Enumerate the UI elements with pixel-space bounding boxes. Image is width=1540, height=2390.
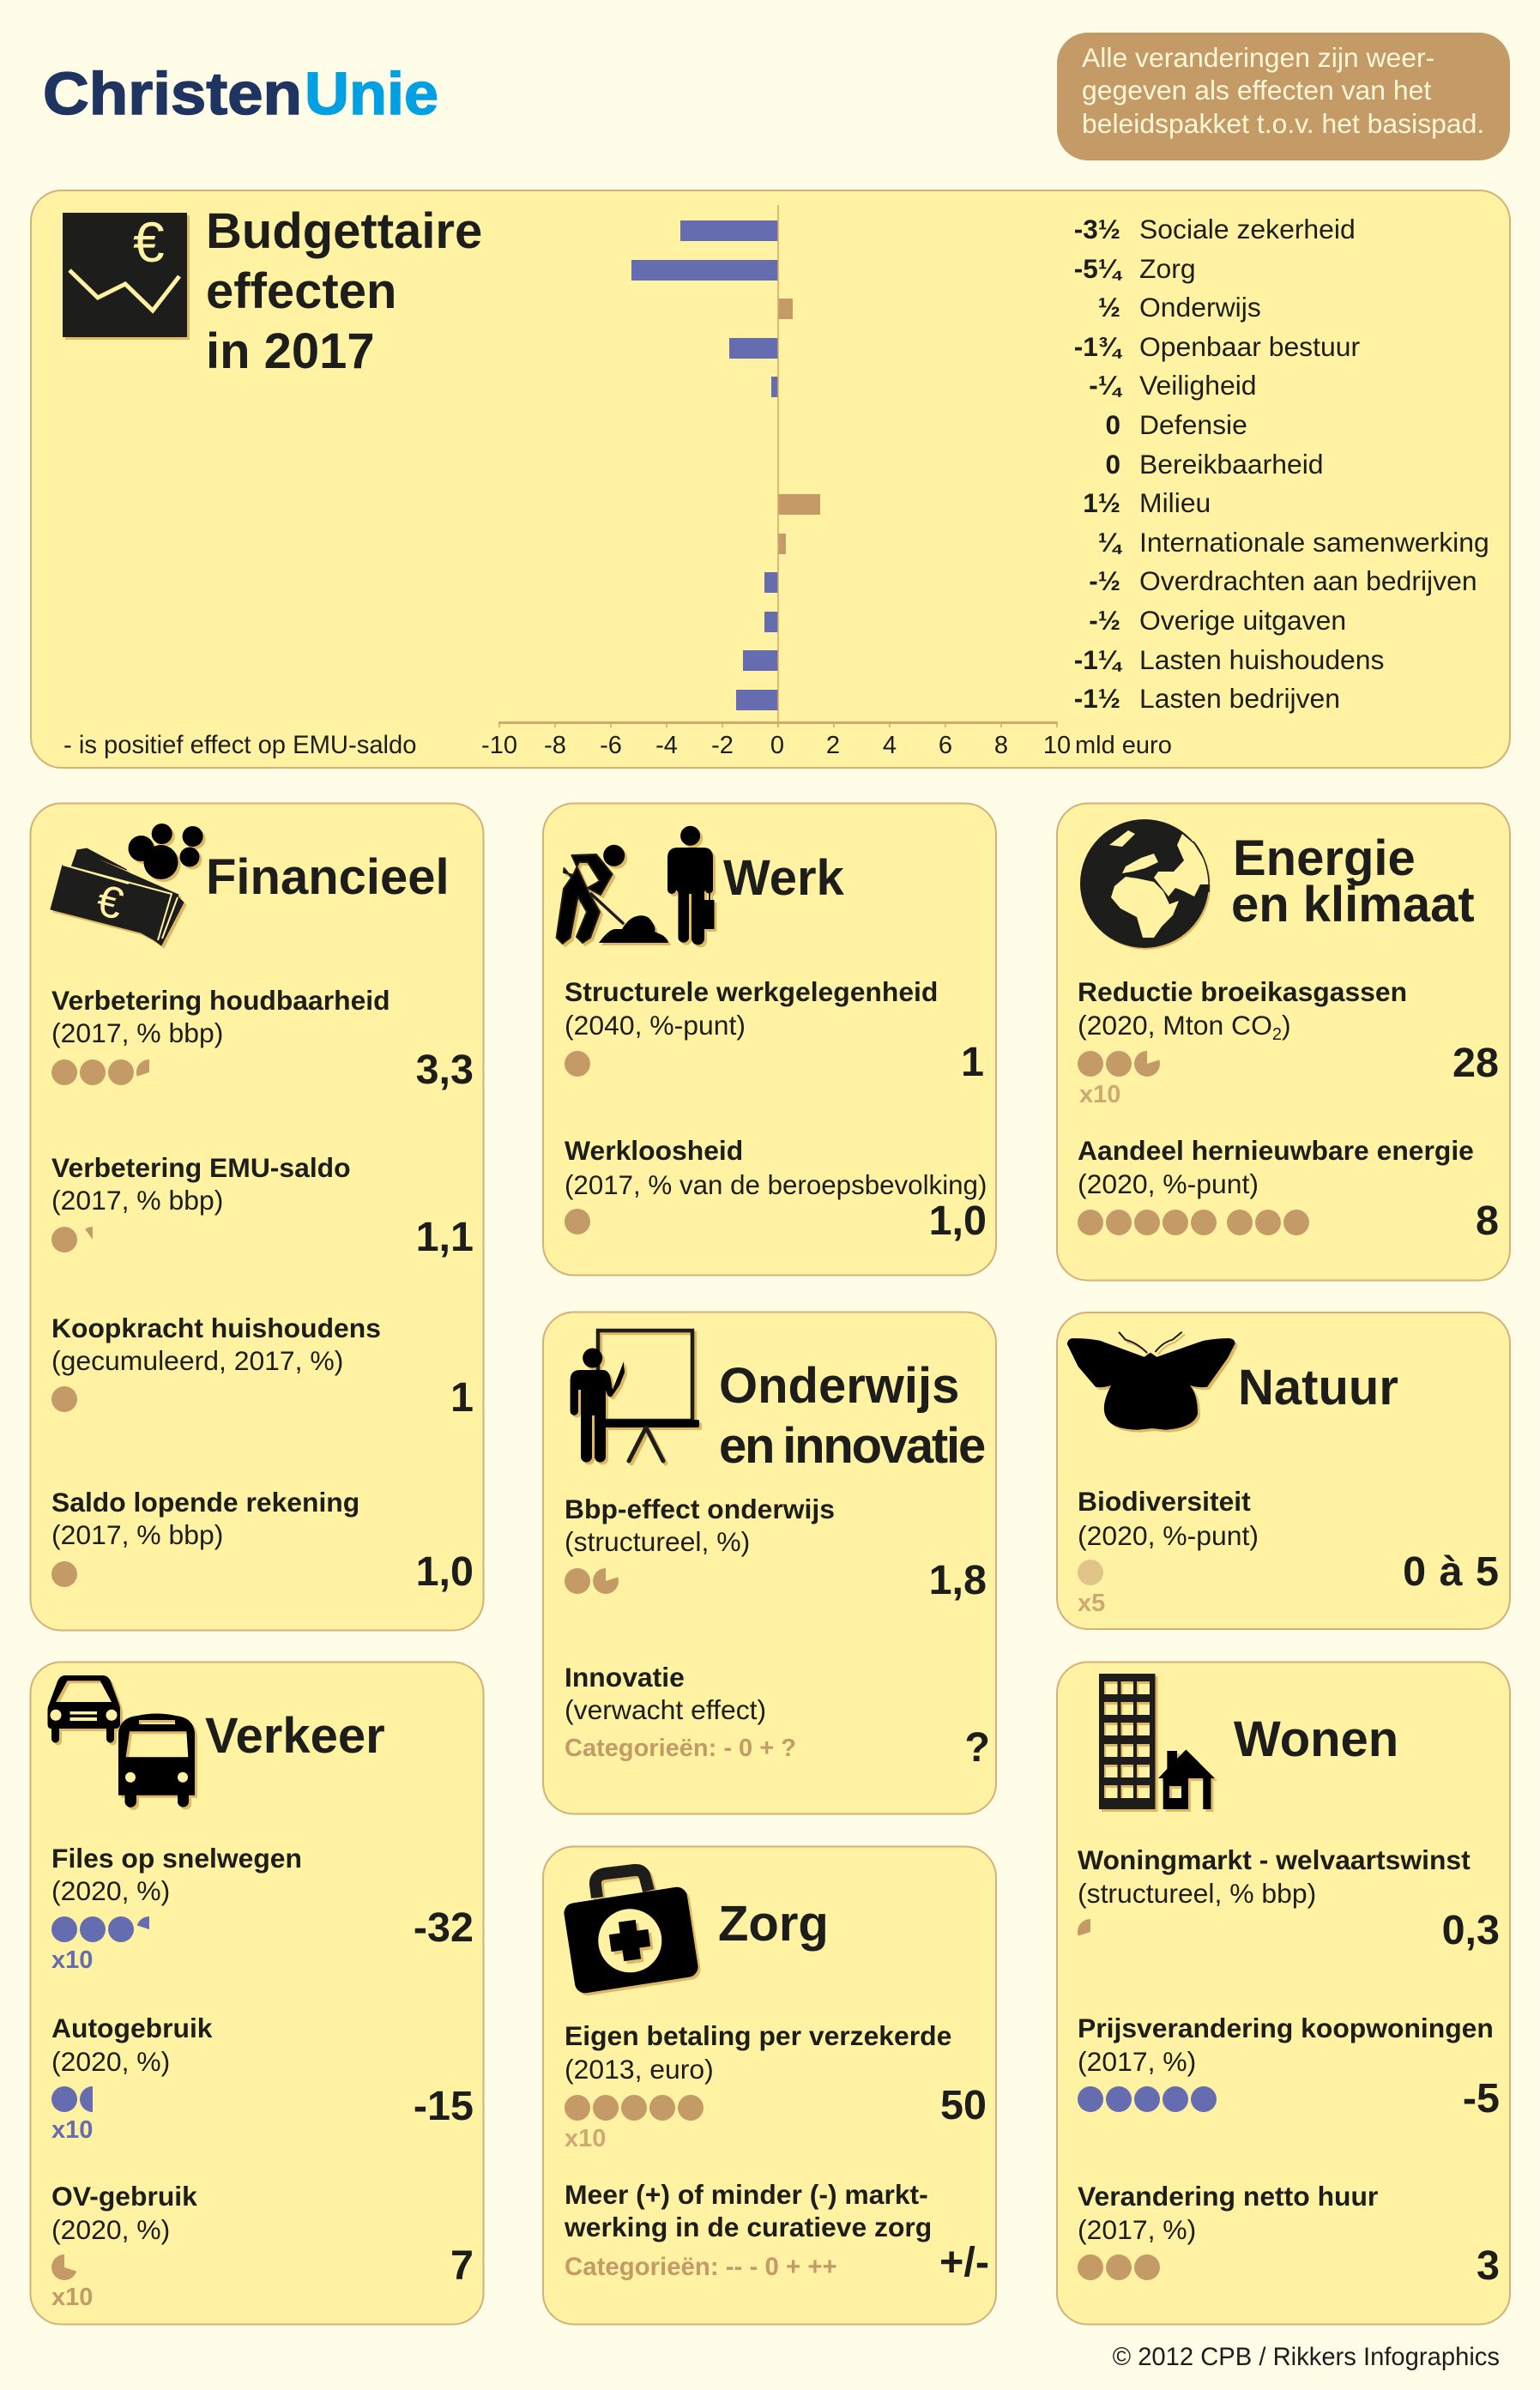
metric: broeikasgassen — [1078, 976, 1499, 1108]
metric: bbp-effect onderwijs: 1,8 — [929, 1557, 987, 1603]
metric: broeikasgassen: (2020, Mton CO — [1078, 1010, 1272, 1041]
table: values per category: -1¼ — [1074, 644, 1123, 675]
metric: biodiversiteit — [1078, 1486, 1500, 1617]
heading: en klimaat — [1231, 877, 1475, 932]
table: values per category: Zorg — [1139, 253, 1196, 284]
metric: hernieuwbare energie: (2020, %-punt) — [1078, 1168, 1259, 1199]
metric: structurele werkgelegenheid: (2040, %-punt) — [565, 1010, 746, 1041]
metric: autogebruik: (2020, %) — [51, 2046, 170, 2077]
table: values per category: -1½ — [1074, 683, 1120, 714]
metric: autogebruik: x10 — [51, 2116, 93, 2144]
metric: structurele werkgelegenheid: 1 — [961, 1039, 984, 1085]
heading: Verkeer — [205, 1708, 385, 1764]
bar chart: budget effects: -2 — [711, 732, 734, 759]
panel: budgettaire effecten — [31, 190, 1510, 768]
bar chart: budget effects: -4 — [655, 732, 678, 759]
metric: woningmarkt — [1078, 1844, 1500, 1953]
metric: bbp-effect onderwijs: Bbp-effect onderwijs — [565, 1494, 835, 1524]
metric: netto huur: (2017, %) — [1078, 2214, 1196, 2245]
metric: koopwoningen: (2017, %) — [1078, 2046, 1196, 2077]
bar chart: budget effects: 4 — [883, 732, 897, 759]
table: values per category: Defensie — [1139, 409, 1247, 440]
metric: houdbaarheid: (2017, % bbp) — [51, 1017, 223, 1048]
metric: houdbaarheid: Verbetering houdbaarheid — [51, 985, 390, 1016]
metric: koopkracht: 1 — [450, 1374, 474, 1421]
metric: koopwoningen: -5 — [1463, 2075, 1500, 2121]
table: values per category: Internationale samenwerking — [1139, 527, 1489, 558]
table: values per category: -½ — [1089, 605, 1120, 636]
heading: Financieel — [206, 849, 450, 905]
heading — [1231, 830, 1475, 932]
metric: werkloosheid: (2017, % van de beroepsbevolking) — [565, 1170, 987, 1200]
metric: houdbaarheid: 3,3 — [416, 1047, 474, 1093]
table: values per category: Openbaar bestuur — [1139, 331, 1360, 362]
panel: energie en klimaat — [1057, 803, 1510, 1280]
metric: broeikasgassen: 2 — [1272, 1025, 1282, 1044]
bar chart: budget effects: 10 — [1043, 732, 1071, 759]
metric: werkloosheid: 1,0 — [929, 1198, 987, 1244]
icon: money — [51, 824, 203, 945]
metric: EMU-saldo: 1,1 — [416, 1214, 474, 1260]
metric: hernieuwbare energie: 8 — [1476, 1198, 1499, 1244]
heading — [719, 1358, 985, 1474]
table: values per category: Sociale zekerheid — [1139, 214, 1356, 244]
panel: natuur — [1057, 1313, 1510, 1629]
heading: Zorg — [718, 1896, 829, 1952]
heading: Natuur — [1238, 1360, 1398, 1415]
metric: biodiversiteit: (2020, %-punt) — [1078, 1520, 1259, 1551]
metric: bbp-effect onderwijs: (structureel, %) — [565, 1526, 750, 1557]
heading: en innovatie — [719, 1418, 985, 1474]
bar chart: budget effects: 2 — [826, 732, 840, 759]
metric: files — [51, 1843, 474, 1974]
metric: innovatie: ? — [964, 1724, 990, 1771]
icon: euro chart: € — [133, 210, 165, 274]
metric: autogebruik: Autogebruik — [51, 2013, 213, 2043]
logo: ChristenUnie — [43, 60, 438, 127]
icon: euro chart — [63, 210, 187, 337]
metric: bbp-effect onderwijs — [565, 1494, 987, 1603]
panel: zorg — [543, 1846, 996, 2325]
metric: ov-gebruik: 7 — [450, 2242, 474, 2289]
metric: eigen betaling: Eigen betaling per verzekerde — [565, 2020, 951, 2051]
panel: financieel — [31, 803, 484, 1630]
metric: eigen betaling: (2013, euro) — [565, 2054, 714, 2085]
metric: lopende rekening — [51, 1487, 474, 1595]
metric: lopende rekening: (2017, % bbp) — [51, 1519, 223, 1550]
table: values per category: Milieu — [1139, 487, 1211, 518]
metric: marktwerking: werking in de curatieve zorg — [564, 2212, 932, 2242]
metric: autogebruik: -15 — [414, 2083, 474, 2129]
metric: innovatie: Innovatie — [565, 1662, 685, 1693]
callout: note on changes — [1057, 33, 1510, 160]
metric: koopkracht — [51, 1313, 474, 1421]
table: values per category: Veiligheid — [1139, 370, 1257, 401]
metric: broeikasgassen: Reductie broeikasgassen — [1078, 976, 1407, 1007]
icon: teacher at board — [571, 1331, 699, 1462]
metric: koopwoningen — [1078, 2013, 1500, 2121]
table: values per category: Lasten bedrijven — [1139, 683, 1340, 714]
bar chart: budget effects: -6 — [600, 732, 622, 759]
metric: ov-gebruik: OV-gebruik — [51, 2181, 197, 2212]
metric: biodiversiteit: Biodiversiteit — [1078, 1486, 1251, 1517]
icon: bus — [118, 1714, 195, 1808]
metric: werkloosheid — [565, 1135, 987, 1244]
callout: note on changes: Alle veranderingen zijn weer- — [1082, 42, 1434, 73]
heading: budgettaire effecten: effecten — [206, 263, 396, 319]
credit line: © 2012 CPB / Rikkers Infographics — [1113, 2344, 1500, 2371]
callout: note on changes: beleidspakket t.o.v. het basispad. — [1082, 108, 1484, 139]
icon: worker and businessman — [557, 826, 714, 945]
metric: biodiversiteit: x5 — [1078, 1590, 1105, 1617]
metric: files: x10 — [51, 1946, 93, 1974]
metric: ov-gebruik: (2020, %) — [51, 2214, 170, 2245]
note: sign convention: - is positief effect op EMU-saldo — [63, 732, 417, 759]
bar chart: budget effects: 8 — [994, 732, 1008, 759]
metric: files: (2020, %) — [51, 1875, 170, 1906]
bar chart: budget effects — [481, 205, 1172, 759]
bar chart: budget effects: 0 — [770, 732, 784, 759]
heading: Werk — [723, 850, 845, 906]
icon: car — [48, 1675, 120, 1743]
heading: budgettaire effecten: Budgettaire — [206, 203, 482, 259]
panel: verkeer — [31, 1663, 484, 2325]
metric: woningmarkt: 0,3 — [1442, 1907, 1500, 1953]
metric: lopende rekening: 1,0 — [416, 1548, 474, 1595]
table: values per category: -½ — [1089, 565, 1120, 596]
metric: broeikasgassen: x10 — [1079, 1081, 1120, 1108]
metric: biodiversiteit: 0 à 5 — [1403, 1548, 1500, 1595]
logo: ChristenUnie: Christen — [43, 60, 302, 127]
metric: eigen betaling: 50 — [940, 2082, 987, 2128]
bar chart: budget effects: 6 — [939, 732, 952, 759]
heading: budgettaire effecten: in 2017 — [206, 323, 375, 379]
metric: netto huur: Verandering netto huur — [1078, 2181, 1378, 2212]
metric: innovatie: Categorieën: - 0 + ? — [565, 1735, 796, 1762]
metric: autogebruik — [51, 2013, 474, 2144]
table: values per category: ½ — [1098, 292, 1120, 323]
metric: marktwerking: Meer (+) of minder (-) markt- — [565, 2179, 928, 2210]
metric: structurele werkgelegenheid: Structurele werkgelegenheid — [565, 976, 938, 1007]
heading: budgettaire effecten — [206, 203, 482, 379]
callout: note on changes: gegeven als effecten van het — [1082, 75, 1431, 106]
metric: EMU-saldo: Verbetering EMU-saldo — [51, 1152, 351, 1183]
metric: eigen betaling: x10 — [565, 2125, 606, 2152]
table: values per category: 1½ — [1083, 487, 1120, 518]
table: values per category: -5¼ — [1074, 253, 1123, 284]
table: values per category: -1¾ — [1074, 331, 1123, 362]
metric: netto huur: 3 — [1477, 2242, 1500, 2289]
table: values per category: 0 — [1105, 449, 1120, 480]
heading: Energie — [1233, 830, 1416, 886]
metric: koopwoningen: Prijsverandering koopwoningen — [1078, 2013, 1494, 2043]
table: values per category: Overige uitgaven — [1139, 605, 1346, 636]
metric: broeikasgassen: ) — [1282, 1010, 1291, 1041]
metric: houdbaarheid — [51, 985, 474, 1093]
table: values per category: -3½ — [1074, 214, 1120, 244]
table: values per category: 0 — [1105, 409, 1120, 440]
table: values per category: ¼ — [1098, 527, 1123, 558]
table: values per category: Overdrachten aan bedrijven — [1139, 565, 1477, 596]
icon: money: € — [92, 875, 128, 930]
metric: files: Files op snelwegen — [51, 1843, 302, 1874]
icon: globe — [1080, 819, 1211, 950]
table: values per category: Lasten huishoudens — [1139, 644, 1384, 675]
bar chart: budget effects: mld euro — [1075, 732, 1172, 759]
table: values per category: Bereikbaarheid — [1139, 449, 1324, 480]
icon: house — [1158, 1750, 1215, 1809]
metric: lopende rekening: Saldo lopende rekening — [51, 1487, 359, 1518]
metric: marktwerking — [564, 2179, 989, 2285]
heading: Wonen — [1234, 1711, 1398, 1767]
metric: ov-gebruik — [51, 2181, 474, 2311]
icon: first aid case — [563, 1870, 699, 1995]
metric: woningmarkt: Woningmarkt - welvaartswinst — [1078, 1844, 1471, 1875]
metric: werkloosheid: Werkloosheid — [565, 1135, 743, 1166]
logo: ChristenUnie: Unie — [305, 60, 438, 127]
metric: koopkracht: Koopkracht huishoudens — [51, 1313, 381, 1343]
table: values per category — [1074, 214, 1489, 714]
panel: wonen — [1057, 1663, 1510, 2325]
metric: files: -32 — [414, 1904, 474, 1951]
metric: woningmarkt: (structureel, % bbp) — [1078, 1878, 1316, 1909]
metric: koopkracht: (gecumuleerd, 2017, %) — [51, 1345, 343, 1376]
panel: werk — [543, 803, 996, 1275]
heading: Onderwijs — [719, 1358, 959, 1414]
metric: eigen betaling — [565, 2020, 987, 2152]
metric: broeikasgassen: 28 — [1452, 1040, 1499, 1086]
panel: onderwijs en innovatie — [543, 1313, 996, 1814]
table: values per category: Onderwijs — [1139, 292, 1261, 323]
metric: innovatie — [565, 1662, 990, 1771]
metric: netto huur — [1078, 2181, 1500, 2289]
metric: marktwerking: Categorieën: -- - 0 + ++ — [565, 2253, 837, 2281]
bar chart: budget effects: -10 — [481, 732, 517, 759]
icon: butterfly — [1067, 1332, 1235, 1430]
metric: structurele werkgelegenheid — [565, 976, 984, 1085]
bar chart: budget effects: -8 — [544, 732, 566, 759]
metric: marktwerking: +/- — [939, 2239, 989, 2285]
metric: EMU-saldo — [51, 1152, 474, 1260]
metric: ov-gebruik: x10 — [51, 2284, 93, 2311]
icon: apartment building — [1099, 1674, 1155, 1809]
metric: EMU-saldo: (2017, % bbp) — [51, 1185, 223, 1216]
table: values per category: -¼ — [1089, 370, 1123, 401]
metric: hernieuwbare energie: Aandeel hernieuwbare energie — [1078, 1135, 1474, 1166]
metric: innovatie: (verwacht effect) — [565, 1694, 766, 1725]
metric: hernieuwbare energie — [1078, 1135, 1499, 1244]
